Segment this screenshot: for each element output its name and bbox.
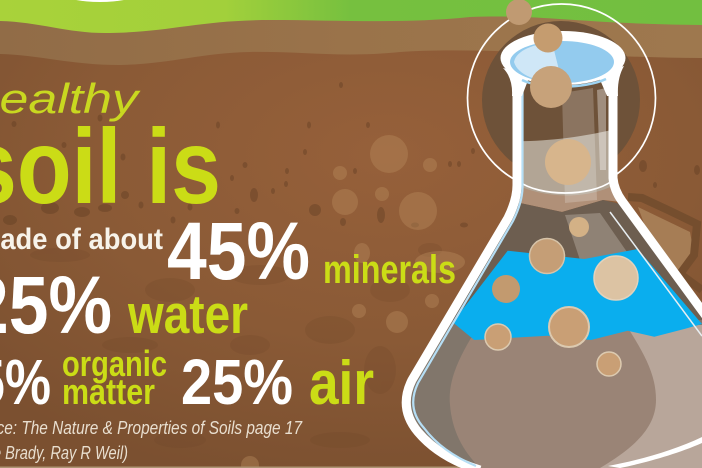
- stat: 45% minerals: 45%: [167, 206, 310, 297]
- soil mound: [450, 328, 656, 468]
- flask contents: [400, 88, 702, 468]
- stat: 25% air: 25%: [181, 346, 293, 418]
- flask bottom highlight: [608, 437, 702, 468]
- water: [453, 249, 702, 340]
- flask right inner line: [610, 212, 702, 336]
- stat: 5% organic matter: [0, 343, 167, 418]
- stat: 45% minerals: minerals: [323, 248, 456, 292]
- ring segment inside neck: [518, 181, 612, 193]
- soil texture lower blobs: [30, 243, 442, 448]
- neck highlight stripe: [562, 88, 597, 203]
- stat: 25% water: water: [127, 283, 248, 345]
- flask rim: [500, 31, 626, 85]
- lower base glass: [400, 320, 702, 468]
- orbit ring behind flask: [468, 4, 656, 192]
- flask inner blue line: [413, 88, 522, 466]
- flask: [400, 31, 702, 468]
- stat: 5% organic matter: organic: [62, 343, 167, 384]
- right light area: [600, 325, 702, 468]
- source citation: [0, 418, 303, 463]
- pink lower neck: [518, 187, 617, 212]
- floating soil particles: [485, 0, 638, 376]
- bottom edge strip: [0, 466, 702, 468]
- background: grass: [0, 0, 702, 60]
- right neck pale strip: [597, 88, 606, 170]
- stat: 25% air: [181, 346, 374, 418]
- stat: 45% minerals: [167, 206, 456, 297]
- soil texture spots: [3, 82, 700, 228]
- flask wall: [406, 80, 702, 468]
- background soil particles: [241, 135, 465, 468]
- dark circle behind flask: [482, 21, 640, 179]
- lower dark glass: [453, 200, 702, 320]
- stat: 25% air: air: [309, 349, 374, 418]
- root shape on right: [628, 197, 702, 290]
- flask rim flare: [503, 66, 624, 96]
- lighter upper neck band: [524, 130, 610, 196]
- stat: 25% water: [0, 260, 248, 351]
- background: topsoil band: [0, 16, 702, 80]
- grey parallelogram: [565, 213, 627, 260]
- stat: 5% organic matter: matter: [62, 371, 155, 412]
